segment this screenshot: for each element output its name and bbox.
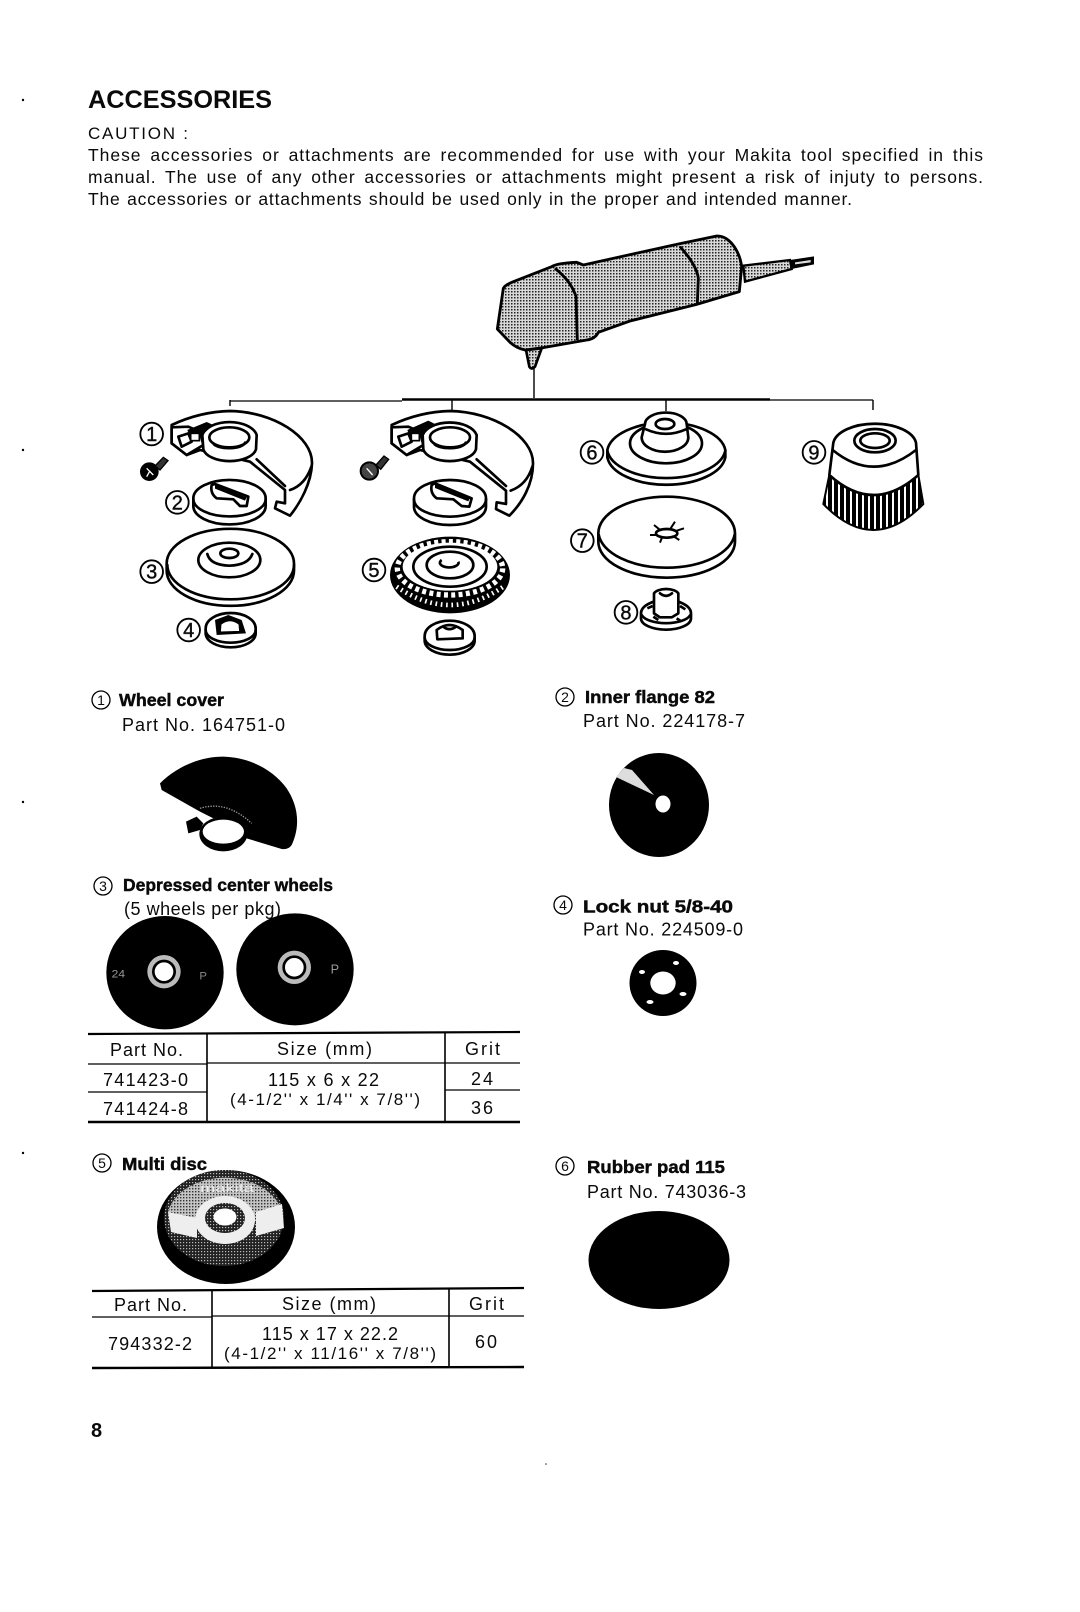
caution text block: CAUTION : [88,124,188,143]
heading: 1 wheel cover: 1 [97,692,105,708]
table: depressed center wheels: 24 [471,1069,493,1089]
table: multi disc: 115 x 17 x 22.2 [262,1324,398,1344]
caution text block: These accessories or attachments are recommended for use with your Makita tool specified in this [88,145,983,165]
callout numbers 1 to 5: 2 [172,492,183,514]
part 3: depressed center wheel drawing [167,529,294,606]
page number: 8 [91,1420,102,1442]
part 6: rubber pad drawing [607,413,725,485]
part 9: wire cup brush drawing [823,424,923,530]
second stack: lock nut [425,621,475,655]
part 1: screw [140,457,168,481]
photo: depressed center wheels: P [199,970,207,982]
callout numbers 1 to 5 [140,423,385,642]
callout numbers 1 to 5: 3 [146,562,157,584]
heading: 6 rubber pad: 6 [561,1158,569,1174]
heading: 5 multi disc: Multi disc [122,1154,207,1174]
heading: 5 multi disc: 5 [98,1155,106,1171]
part 7: disc drawing [598,497,735,578]
callout numbers 6 to 9: 8 [620,602,632,624]
exploded parts: pad stack and brush [571,413,923,630]
photo: depressed center wheels [106,913,354,1029]
callout numbers 1 to 5: 4 [183,620,194,642]
second stack: screw [361,456,389,480]
heading: 4 lock nut [554,896,743,940]
table: depressed center wheels: Part No. [110,1040,183,1060]
part 5: multi disc drawing [390,537,510,613]
second stack: flange [414,480,486,525]
callout numbers 1 to 5: 5 [368,560,380,582]
heading: 1 wheel cover: Part No. 164751-0 [122,715,285,735]
heading: 3 depressed center wheels: (5 wheels per pkg) [124,899,281,919]
heading: 4 lock nut: 4 [559,897,567,913]
second stack: wheel cover drawing [392,411,533,516]
heading: 3 depressed center wheels [94,875,333,919]
heading: 1 wheel cover [92,690,285,735]
table: multi disc [92,1288,524,1368]
table: depressed center wheels [88,1032,520,1122]
table: multi disc: 60 [475,1332,497,1352]
heading: 3 depressed center wheels: Depressed center wheels [123,875,333,895]
photo: wheel cover [160,757,297,851]
callout numbers 6 to 9 [571,441,825,624]
part 1: wheel cover drawing [172,411,312,516]
heading: 6 rubber pad [556,1157,746,1202]
icon: angle grinder tool [497,236,814,368]
heading: 1 wheel cover: Wheel cover [119,690,224,710]
part 2: inner flange drawing [193,480,266,524]
part 4: lock nut drawing [206,613,256,647]
table: multi disc: 794332-2 [108,1334,192,1354]
caution text block: manual. The use of any other accessories or attachments might present a risk of injuty to persons. [88,167,983,187]
photo: lock nut [630,950,696,1016]
heading: 2 inner flange [556,687,745,731]
table: depressed center wheels: 36 [471,1098,493,1118]
callout numbers 6 to 9: 9 [808,442,820,464]
table: depressed center wheels: 741424-8 [103,1099,188,1119]
table: depressed center wheels: 741423-0 [103,1070,188,1090]
exploded parts: left and second stack [140,411,533,655]
callout numbers 6 to 9: 6 [586,442,598,464]
title: ACCESSORIES [88,86,272,114]
callout numbers 1 to 5: 1 [146,424,157,446]
heading: 2 inner flange: Part No. 224178-7 [583,711,745,731]
heading: 6 rubber pad: Part No. 743036-3 [587,1182,746,1202]
photo: inner flange [609,753,709,857]
heading: 3 depressed center wheels: 3 [99,878,107,894]
photo: depressed center wheels: P [331,962,339,976]
heading: 2 inner flange: Inner flange 82 [585,687,715,707]
table: depressed center wheels: (4-1/2'' x 1/4'' x 7/8'') [230,1090,420,1109]
part 8: nut drawing [641,589,691,630]
heading: 4 lock nut: Part No. 224509-0 [583,920,743,940]
heading: 2 inner flange: 2 [561,689,569,705]
table: multi disc: (4-1/2'' x 11/16'' x 7/8'') [224,1344,436,1363]
heading: 4 lock nut: Lock nut 5/8-40 [583,896,733,916]
caution text block: The accessories or attachments should be used only in the proper and intended manner. [88,189,852,209]
connector lines [230,368,873,411]
photo: multi disc [157,1170,295,1284]
callout numbers 6 to 9: 7 [577,531,588,553]
table: depressed center wheels: 115 x 6 x 22 [268,1070,379,1090]
table: depressed center wheels: Grit [465,1039,500,1059]
table: depressed center wheels: Size (mm) [277,1039,372,1059]
photo: rubber pad [588,1211,730,1309]
table: multi disc: Grit [469,1294,504,1314]
table: multi disc: Size (mm) [282,1294,376,1314]
heading: 6 rubber pad: Rubber pad 115 [587,1157,725,1177]
photo: multi disc: makita [200,1181,254,1195]
table: multi disc: Part No. [114,1295,187,1315]
photo: depressed center wheels: 24 [112,969,125,981]
caution text block [88,124,983,209]
